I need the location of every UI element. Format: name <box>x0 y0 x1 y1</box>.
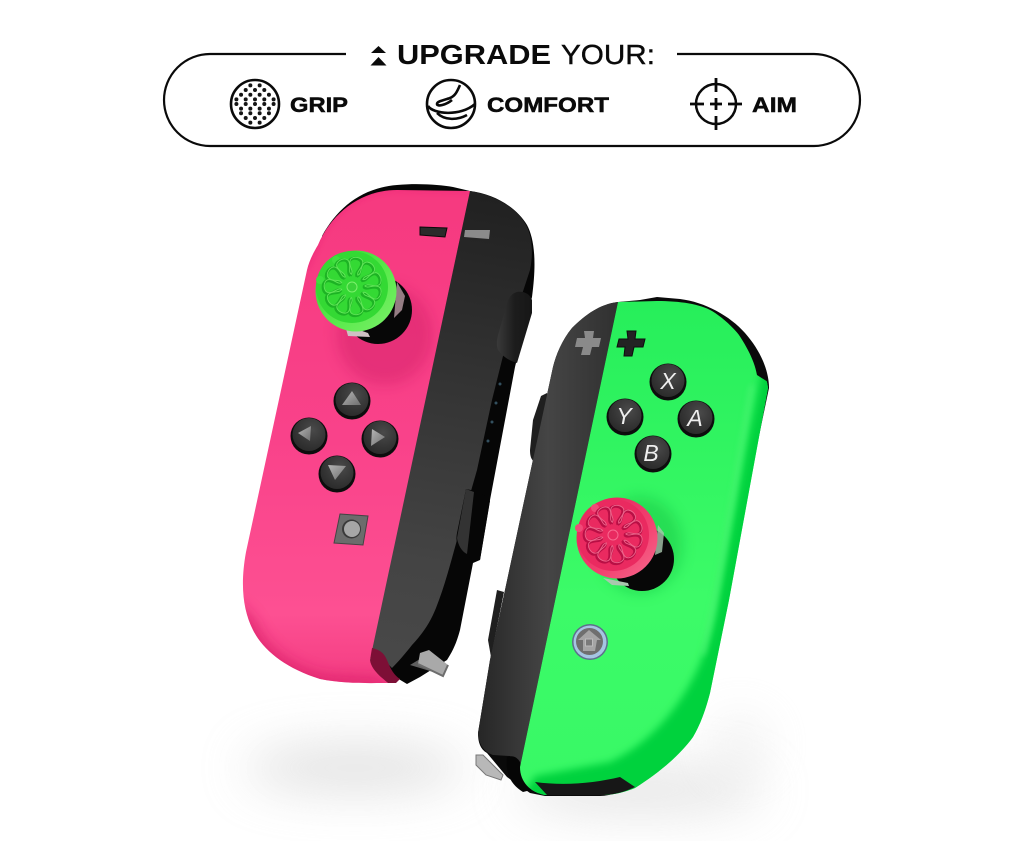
SR lower button <box>456 489 490 560</box>
plus button <box>617 331 645 356</box>
green shell <box>520 301 768 795</box>
heading: upgrade your: YOUR: <box>561 39 655 70</box>
y button: Y <box>616 403 633 429</box>
minus button <box>420 227 447 237</box>
lower shoulder button <box>488 590 504 657</box>
heading: upgrade your <box>397 39 655 70</box>
infographic canvas <box>162 44 862 826</box>
face buttons <box>606 364 714 472</box>
down button <box>318 456 356 492</box>
capture button <box>334 514 368 545</box>
directional buttons <box>290 382 398 492</box>
black rear shell <box>322 184 534 684</box>
grey face panel <box>478 302 618 767</box>
slider rail lights <box>486 382 502 442</box>
plus mark on panel <box>575 331 601 355</box>
dark lip near rail <box>507 756 531 792</box>
banner rounded outline <box>164 54 860 146</box>
neon pink left controller <box>235 180 534 690</box>
neon green right controller <box>476 295 790 810</box>
label: grip: GRIP <box>290 94 348 117</box>
up button <box>334 382 370 420</box>
icon: comfort thumb <box>427 80 475 128</box>
floor shadows <box>245 717 765 816</box>
icon: aim crosshair <box>690 78 742 130</box>
dark red lip <box>370 648 400 683</box>
upgrade banner panel <box>164 39 860 146</box>
pink shell <box>235 180 475 690</box>
label: comfort: COMFORT <box>487 94 609 117</box>
thumbstick with green grip <box>316 250 412 344</box>
grey face panel <box>372 191 532 668</box>
heading: upgrade your: UPGRADE <box>397 39 551 70</box>
thumbstick with pink grip <box>575 498 674 591</box>
right button <box>362 420 398 458</box>
minus mark on panel <box>464 230 490 239</box>
SL shoulder button <box>497 292 532 363</box>
black bottom notch <box>535 777 635 795</box>
sync slider tab <box>476 755 503 780</box>
icon: double up arrows <box>370 46 386 66</box>
black corner near top right <box>733 326 768 382</box>
home button <box>572 624 608 660</box>
label: aim: AIM <box>752 94 797 117</box>
left shoulder button <box>530 393 548 462</box>
left button <box>290 418 328 454</box>
a button: A <box>685 405 703 431</box>
b button: B <box>643 440 659 466</box>
sync slider tab <box>410 650 448 676</box>
icon: grip dots <box>231 80 279 128</box>
black rear shell <box>478 297 769 796</box>
x button: X <box>659 368 677 394</box>
